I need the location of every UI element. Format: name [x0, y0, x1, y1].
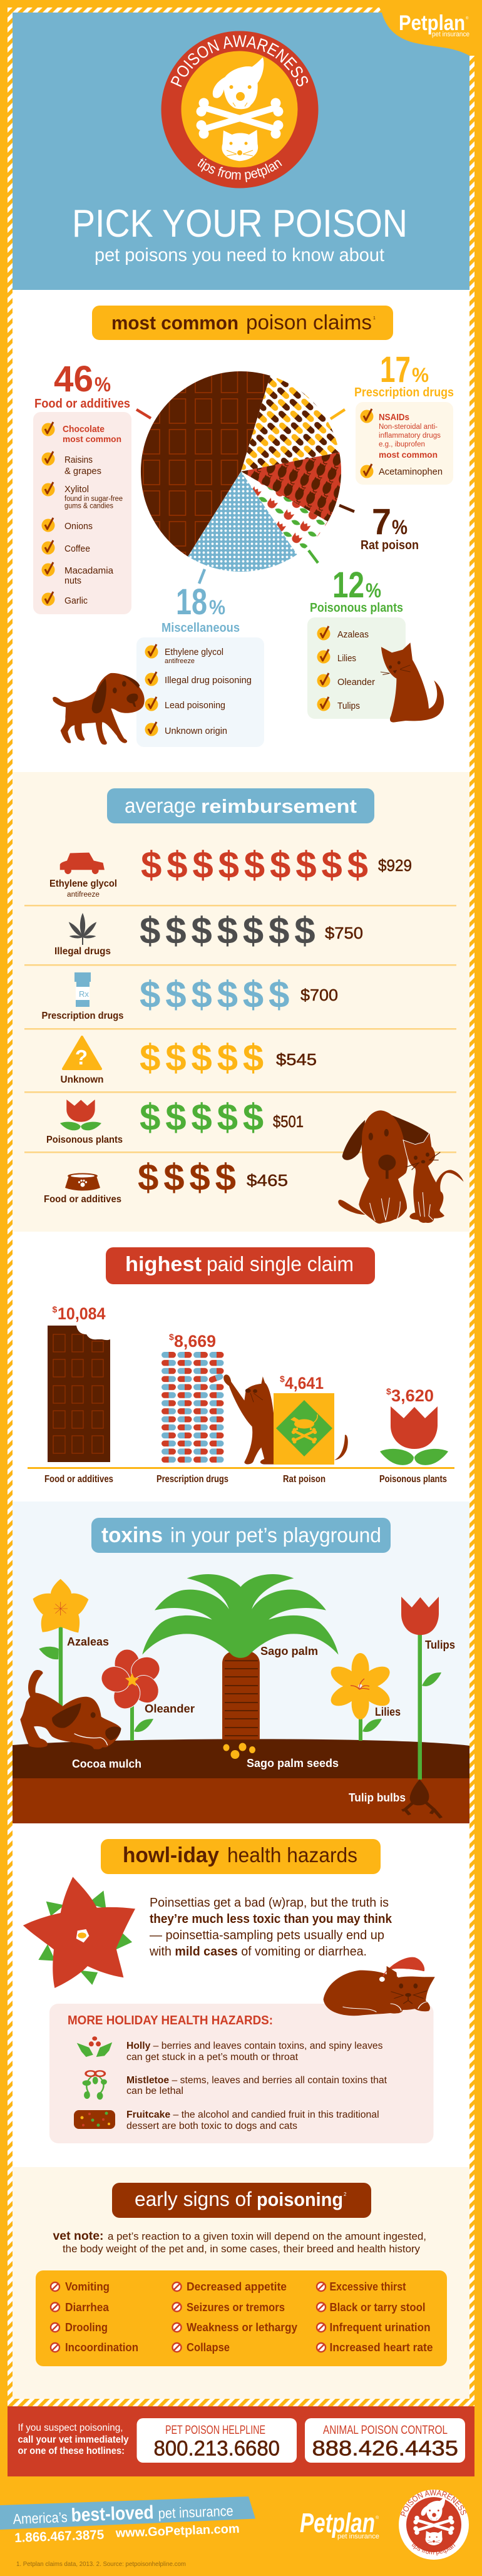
vet note: a pet’s reaction to a given toxin will depend on the amount ingested, [108, 2230, 426, 2242]
panel: miscellaneous list: antifreeze [165, 657, 195, 665]
text: poinsettias [149, 1896, 392, 1959]
row: poisonous plants: Poisonous plants [46, 1135, 123, 1145]
heading: toxins: in your pet’s playground [170, 1523, 381, 1547]
icon: pet bowl [65, 1173, 100, 1191]
heading: most common poison claims: 1 [373, 316, 376, 321]
panel: food list: Xylitol [64, 484, 89, 495]
row: prescription drugs: Prescription drugs [41, 1011, 124, 1021]
bar: food or additives, chocolate: $ [53, 1304, 58, 1314]
heading: highest paid single claim: paid single claim [207, 1252, 354, 1275]
panel: miscellaneous list: Lead poisoning [165, 700, 225, 711]
heading: howl-iday health hazards [101, 1839, 381, 1874]
label: 12% poisonous plants: Poisonous plants [310, 601, 403, 615]
logo corner: pet insurance [432, 31, 469, 38]
bar: rat poison box [274, 1374, 334, 1465]
icon: pill bottle [74, 972, 91, 1007]
bar: poisonous plants tulip: 3,620 [391, 1386, 434, 1405]
row: illegal drugs: $$$$$$$ [140, 910, 315, 952]
subtitle: pet poisons you need to know about [95, 245, 385, 265]
plant: azaleas: Azaleas [67, 1636, 109, 1648]
text: poinsettias: with mild cases of vomiting or diarrhea. [149, 1945, 367, 1959]
text: holly: Holly – berries and leaves contain toxins, and spiny leaves [126, 2041, 383, 2051]
footer [0, 2490, 469, 2568]
panel: symptoms: Increased heart rate [329, 2341, 433, 2354]
pie chart [141, 371, 341, 572]
panel: prescription list: inflammatory drugs [379, 432, 441, 440]
text: poinsettias: Poinsettias get a bad (w)rap, but the truth is [150, 1896, 389, 1910]
panel: food list: Garlic [64, 595, 88, 606]
section: average reimbursement [13, 772, 469, 1232]
icon: mistletoe [83, 2071, 107, 2099]
panel: symptoms: Decreased appetite [187, 2280, 287, 2293]
row: food or additives [44, 1157, 288, 1205]
row: poisonous plants [46, 1096, 304, 1145]
heading: average reimbursement: average [125, 794, 196, 817]
mini badge: POISON AWARENESS [401, 2490, 466, 2517]
mini badge [399, 2490, 469, 2560]
panel: food list: found in sugar-free [64, 495, 123, 503]
plant: tulip with bulb: Tulip bulbs [349, 1791, 406, 1804]
label: 17% prescription drugs: % [412, 364, 429, 386]
panel: symptoms: Weakness or lethargy [187, 2321, 297, 2334]
illustration: digging dog [20, 1670, 121, 1749]
phone and url: 1.866.467.3875 [14, 2528, 105, 2545]
axis labels: Rat poison [283, 1474, 326, 1485]
hotline band [8, 2406, 474, 2476]
icon: fruitcake [74, 2110, 115, 2129]
label: 17% prescription drugs [354, 349, 454, 399]
axis labels [44, 1474, 447, 1485]
label: 7% rat poison: 7 [372, 502, 391, 542]
bar: rat poison box: $ [280, 1374, 285, 1384]
label: 46% food or additives: % [95, 373, 111, 396]
row: prescription drugs: $700 [300, 986, 338, 1004]
row: illegal drugs: Illegal drugs [54, 946, 111, 957]
panel: plants list [307, 617, 406, 719]
text: fruitcake: Fruitcake – the alcohol and candied fruit in this traditional [126, 2110, 379, 2120]
label: 18% miscellaneous [162, 582, 240, 635]
label: 12% poisonous plants: 12 [332, 565, 364, 605]
panel: prescription list: NSAIDs [379, 413, 409, 423]
row: food or additives: Food or additives [44, 1194, 121, 1205]
tick marks [136, 410, 354, 584]
section: most common poison claims [13, 290, 469, 772]
panel: symptoms: Seizures or tremors [187, 2301, 285, 2314]
illustration: sitting cat [381, 642, 444, 723]
label: 7% rat poison [361, 502, 419, 552]
heading: highest paid single claim [106, 1247, 375, 1284]
bar: food or additives, chocolate [48, 1304, 110, 1462]
row: unknown: $$$$$ [140, 1037, 264, 1079]
panel: symptoms: Drooling [65, 2321, 108, 2334]
label: 18% miscellaneous: Miscellaneous [162, 621, 240, 635]
panel: symptoms: Incoordination [65, 2341, 138, 2354]
row: illegal drugs: $750 [325, 924, 363, 942]
panel: miscellaneous list: Illegal drug poisoning [165, 675, 252, 686]
hotline: pet poison helpline: PET POISON HELPLINE [165, 2424, 265, 2437]
poison awareness badge: tips from petplan [198, 158, 282, 182]
row: poisonous plants: $$$$$ [140, 1096, 264, 1138]
illustration: reaching cat [223, 1374, 348, 1465]
panel: food list: & grapes [64, 466, 101, 477]
row: ethylene glycol: Ethylene glycol [49, 878, 117, 889]
section: highest paid single claim [13, 1232, 469, 1502]
plant: tulip with bulb: Tulips [425, 1639, 455, 1651]
heading: early signs of poisoning: 2 [344, 2192, 347, 2197]
label: 12% poisonous plants [310, 565, 403, 615]
panel: prescription list: e.g., ibuprofen [379, 441, 425, 448]
row: prescription drugs [41, 972, 338, 1021]
row: unknown: Unknown [60, 1074, 104, 1085]
label: 46% food or additives [34, 359, 130, 411]
heading: early signs of poisoning [112, 2183, 371, 2218]
label: 18% miscellaneous: 18 [176, 582, 207, 622]
call to action [18, 2423, 129, 2456]
panel: prescription list: Acetaminophen [379, 466, 443, 477]
hotline: animal poison control: ANIMAL POISON CONTROL [323, 2424, 448, 2437]
logo corner: Petplan [399, 11, 465, 35]
heading: howl-iday health hazards: health hazards [227, 1843, 357, 1867]
soil layers [13, 1739, 469, 1823]
bar: poisonous plants tulip: $ [386, 1386, 391, 1396]
axis labels: Poisonous plants [379, 1474, 447, 1485]
panel: miscellaneous list [136, 637, 264, 747]
panel: plants list: Tulips [337, 701, 360, 711]
heading: most common poison claims [92, 306, 393, 340]
heading: toxins [91, 1518, 391, 1553]
label: 46% food or additives: 46 [54, 359, 93, 399]
panel: prescription list: Non-steroidal anti- [379, 423, 438, 431]
text: poinsettias: — poinsettia-sampling pets usually end up [150, 1929, 384, 1942]
panel: food list: Onions [64, 521, 93, 532]
row: ethylene glycol [49, 844, 412, 899]
label: 46% food or additives: Food or additives [34, 397, 130, 411]
text: mistletoe: Mistletoe – stems, leaves and berries all contain toxins that [126, 2075, 387, 2086]
bar: prescription drugs, pills [162, 1332, 225, 1465]
label: 18% miscellaneous: % [209, 596, 225, 619]
label: 17% prescription drugs: Prescription drugs [354, 386, 454, 399]
panel: food list: nuts [64, 575, 81, 586]
label: 12% poisonous plants: % [366, 579, 381, 602]
title: PICK YOUR POISON [72, 202, 408, 245]
row: illegal drugs [54, 910, 363, 957]
hotline: animal poison control [305, 2418, 465, 2463]
panel: plants list: Lilies [337, 653, 356, 664]
label: cocoa mulch: Cocoa mulch [72, 1758, 141, 1770]
sago palm seeds: Sago palm seeds [247, 1757, 339, 1770]
poison awareness badge: POISON AWARENESS [170, 35, 308, 87]
label: 7% rat poison: Rat poison [361, 538, 419, 552]
plant: lilies: Lilies [375, 1706, 401, 1718]
heading: early signs of poisoning: early signs of [135, 2188, 252, 2210]
axis labels: Food or additives [44, 1474, 113, 1485]
plant: sago palm [142, 1574, 339, 1739]
panel: symptoms: Black or tarry stool [329, 2301, 426, 2314]
panel: plants list: Azaleas [337, 629, 369, 640]
bar: prescription drugs, pills: $ [169, 1332, 174, 1342]
phone and url [14, 2522, 240, 2545]
banner: best-loved pet insurance: America’s [13, 2509, 68, 2527]
panel: miscellaneous list: Ethylene glycol [165, 647, 223, 657]
logo corner [379, 8, 474, 56]
petplan logo: ® [376, 2515, 379, 2520]
row: unknown: $545 [276, 1050, 317, 1069]
heading: most common poison claims: poison claims [246, 311, 372, 334]
heading: average reimbursement [107, 788, 374, 823]
section: toxins in your pet's playground [13, 1502, 469, 1823]
panel: prescription list [356, 402, 453, 485]
panel: symptoms: Vomiting [65, 2280, 110, 2293]
heading: average reimbursement: reimbursement [201, 795, 357, 817]
plant: sago palm: Sago palm [260, 1645, 318, 1657]
sago palm seeds [223, 1743, 339, 1770]
bar: rat poison box: 4,641 [285, 1374, 324, 1393]
illustration: dog and cat [338, 1110, 464, 1224]
poison awareness badge [162, 31, 318, 188]
row: poisonous plants: $501 [273, 1112, 304, 1131]
heading: howl-iday health hazards: howl-iday [123, 1843, 219, 1867]
icon: warning triangle: ? [75, 1046, 88, 1069]
panel heading: MORE HOLIDAY HEALTH HAZARDS: [68, 2014, 273, 2027]
row: ethylene glycol: $929 [378, 856, 412, 875]
text: holly [126, 2041, 383, 2063]
panel: food list: Macadamia [64, 565, 114, 576]
section: early signs of poisoning [13, 2167, 469, 2399]
row: food or additives: $465 [247, 1171, 288, 1190]
call to action: If you suspect poisoning, [18, 2423, 123, 2433]
hotline: pet poison helpline: 800.213.6680 [154, 2437, 280, 2461]
row: food or additives: $$$$ [138, 1157, 236, 1198]
heading: highest paid single claim: highest [125, 1252, 202, 1275]
icon: pill bottle: Rx [79, 989, 89, 999]
label: 17% prescription drugs: 17 [380, 349, 411, 390]
petplan logo: Petplan [300, 2508, 375, 2538]
phone and url: www.GoPetplan.com [115, 2522, 240, 2540]
text: mistletoe: can be lethal [126, 2086, 183, 2096]
icon: car [60, 853, 105, 874]
panel: prescription list: most common [379, 450, 438, 460]
row: prescription drugs: $$$$$$ [140, 974, 289, 1016]
petplan logo: pet insurance [337, 2533, 379, 2540]
banner: best-loved pet insurance: pet insurance [158, 2503, 233, 2522]
bar: poisonous plants tulip [380, 1386, 448, 1465]
bar: food or additives, chocolate: 10,084 [58, 1304, 105, 1323]
logo corner: ® [466, 16, 469, 21]
panel: more holiday health hazards [49, 2004, 433, 2143]
panel: symptoms: Excessive thirst [329, 2280, 406, 2293]
call to action: call your vet immediately [18, 2434, 129, 2445]
banner: best-loved pet insurance: best-loved [71, 2502, 154, 2526]
illustration: standing dog [53, 673, 145, 744]
panel: food list: gums & candies [64, 502, 113, 510]
plant: tulip with bulb [349, 1597, 455, 1818]
mini badge: tips from petplan [412, 2543, 456, 2556]
panel: food list [33, 412, 131, 614]
panel: symptoms [36, 2270, 447, 2366]
vet note [53, 2230, 426, 2255]
panel: food list: Chocolate [63, 424, 105, 435]
hotline: animal poison control: 888.426.4435 [312, 2437, 458, 2461]
heading: most common poison claims: most common [111, 312, 238, 334]
icon: leaf [67, 913, 98, 945]
plant: azaleas [33, 1579, 109, 1708]
text: poinsettias: they’re much less toxic than you may think [150, 1912, 392, 1926]
banner: best-loved pet insurance [0, 2496, 255, 2530]
icon: tulip [60, 1100, 101, 1130]
section: howl-iday health hazards [13, 1823, 469, 2167]
footnote: 1. Petplan claims data, 2013. 2. Source: petpoisonhelpline.com [16, 2560, 186, 2568]
row: unknown [60, 1037, 317, 1085]
plant: oleander [98, 1649, 195, 1741]
row: ethylene glycol: antifreeze [67, 891, 100, 899]
panel: miscellaneous list: Unknown origin [165, 726, 227, 736]
heading: toxins: toxins [101, 1523, 163, 1547]
text: fruitcake [126, 2110, 379, 2131]
panel: symptoms: Collapse [187, 2341, 230, 2354]
panel: food list: most common [63, 434, 121, 444]
illustration: cat in santa hat [324, 1957, 435, 2016]
icon: holly [77, 2036, 112, 2057]
text: holly: can get stuck in a pet’s mouth or throat [126, 2052, 299, 2063]
hero panel [13, 8, 474, 290]
panel: symptoms: Infrequent urination [329, 2321, 431, 2334]
text: fruitcake: dessert are both toxic to dogs and cats [126, 2121, 297, 2131]
plant: lilies [327, 1653, 401, 1741]
vet note: vet note: [53, 2230, 104, 2243]
call to action: or one of these hotlines: [18, 2446, 125, 2456]
panel: symptoms: Diarrhea [65, 2301, 110, 2314]
plant: oleander: Oleander [145, 1703, 195, 1715]
hotline: pet poison helpline [136, 2418, 297, 2463]
row: ethylene glycol: $$$$$$$$$ [141, 844, 368, 886]
label: 7% rat poison: % [392, 516, 408, 538]
panel: food list: Raisins [64, 455, 93, 465]
panel: plants list: Oleander [337, 677, 375, 688]
illustration: poinsettia [23, 1877, 135, 1988]
icon: warning triangle [63, 1037, 101, 1069]
panel: food list: Coffee [64, 544, 90, 554]
bar: prescription drugs, pills: 8,669 [174, 1332, 216, 1351]
text: mistletoe [126, 2075, 387, 2096]
axis labels: Prescription drugs [156, 1474, 228, 1485]
heading: early signs of poisoning: poisoning [257, 2188, 343, 2210]
vet note: the body weight of the pet and, in some cases, their breed and health history [63, 2243, 420, 2255]
